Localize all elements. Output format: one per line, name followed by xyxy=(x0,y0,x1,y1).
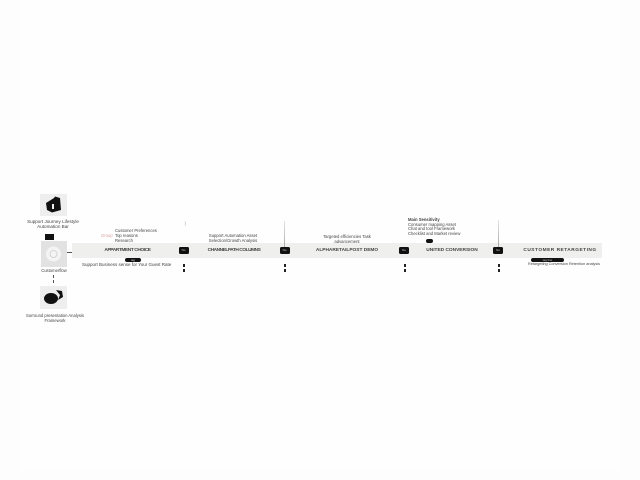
pill: stage 5: tag line xyxy=(543,258,552,262)
icon: small legend marker xyxy=(45,234,54,240)
text: top input caption: Automation Bar xyxy=(37,224,69,229)
pill: stage 1: tag xyxy=(131,258,135,262)
text: hub caption: Customerflow xyxy=(41,268,67,273)
text: stage 1 notes: Research xyxy=(115,238,133,243)
marker: stage 4 node xyxy=(493,247,503,254)
text: stage 1 notes xyxy=(115,228,157,243)
heading: stage 5: CUSTOMER RETARGETING xyxy=(523,248,597,252)
text: stage 2 notes: Selection/Growth Analysis xyxy=(209,238,257,243)
icon: top input xyxy=(40,194,67,216)
text: bottom input caption: Framework xyxy=(45,318,65,323)
tick below node 3 xyxy=(404,264,406,272)
marker: stage 1 node xyxy=(178,247,188,254)
text: stage 4 notes: Consumer mapping Asset xyxy=(408,222,456,227)
text: stage 4 notes: Checklist and Market review xyxy=(408,231,460,236)
text: stage 5 footnote: Retargeting Conversion Retention analysis xyxy=(528,262,600,266)
text: stage 2 notes: Support Automation Asset xyxy=(209,233,257,238)
text: top input caption xyxy=(27,219,79,229)
text: stage 3 notes: advancement xyxy=(334,238,360,244)
pill: stage 4 xyxy=(426,239,433,243)
heading: stage 1: APPARTMENT CHOICE xyxy=(104,248,151,252)
text: stage 1 footnote: Support Business sense for Your Guest Rate xyxy=(82,262,171,267)
marker: stage 3 node: No xyxy=(402,248,406,252)
text: stage 3 notes: Targeted efficiencies Task xyxy=(323,234,371,239)
text: stage 1 notes: Top reasons xyxy=(115,233,138,238)
marker: stage 1 node: No xyxy=(182,248,185,252)
connector from hub to band xyxy=(66,252,72,253)
icon: central hub xyxy=(41,241,67,267)
tick below node 4 xyxy=(498,264,500,272)
connector below hub xyxy=(53,275,54,284)
timeline band xyxy=(72,243,602,258)
vertical line: node 2 xyxy=(284,221,285,247)
marker: stage 3 node xyxy=(399,247,409,254)
red accent label: Group xyxy=(101,233,113,238)
text: stage 4 notes xyxy=(408,217,460,236)
small mark above node 1 xyxy=(182,221,186,226)
tick below node 2 xyxy=(284,264,286,272)
pill: stage 5 xyxy=(531,258,564,262)
text: bottom input caption xyxy=(26,313,84,323)
vertical line: node 4 xyxy=(498,220,499,247)
text: stage 3 notes xyxy=(323,234,371,244)
heading: stage 2: CHANNELPATH COLUMNS xyxy=(208,248,260,252)
marker: stage 4 node: No xyxy=(496,248,500,252)
text: stage 4 notes: Main Sensitivity xyxy=(408,217,440,222)
icon: bottom input xyxy=(40,286,67,309)
marker: stage 2 node: No xyxy=(283,248,286,252)
text: stage 4 notes: Chat and tool Framework xyxy=(408,226,455,231)
text: bottom input caption: Surround presentation Analysis xyxy=(26,313,84,318)
text: stage 2 notes xyxy=(209,233,258,243)
pill: stage 1 xyxy=(125,258,141,262)
marker: stage 2 node xyxy=(280,247,290,254)
text: stage 1 notes: Customer Preferences xyxy=(115,228,157,233)
heading: stage 4: UNITED CONVERSION xyxy=(426,248,478,252)
text: top input caption: Support Journey Lifestyle xyxy=(27,219,79,224)
tick below node 1 xyxy=(183,264,184,272)
heading: stage 3: ALPHARETAILPOST DEMO xyxy=(316,248,378,252)
